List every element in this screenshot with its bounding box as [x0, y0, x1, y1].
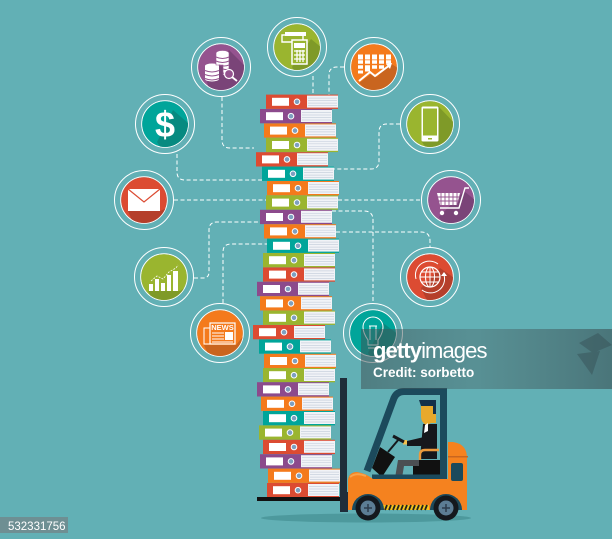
image id tag — [0, 517, 68, 533]
connector: growth chart — [194, 222, 260, 278]
icon: globe — [400, 248, 460, 307]
binder 8 — [266, 195, 338, 210]
dashed connector lines — [174, 67, 430, 303]
icon: calculator — [268, 18, 327, 77]
icon: dollar — [136, 94, 195, 154]
binder 3 — [264, 123, 336, 138]
binder 7 — [267, 181, 339, 195]
connector: news — [223, 244, 267, 303]
image id number: 532331756 — [8, 521, 66, 533]
binder 28 — [267, 483, 339, 497]
steering — [372, 436, 404, 477]
connector: dollar — [177, 154, 263, 180]
icon: mail — [114, 170, 174, 230]
news label: NEWS — [211, 323, 234, 332]
icon: market chart — [344, 38, 404, 97]
armrest — [420, 450, 439, 460]
vent — [451, 463, 463, 481]
legs — [395, 460, 419, 478]
seat — [413, 460, 441, 478]
binder 14 — [257, 282, 329, 296]
icon: cart — [422, 170, 481, 230]
connector: market chart — [329, 67, 344, 95]
binder stack — [253, 95, 340, 497]
icon: news — [190, 304, 250, 363]
connector: coins — [222, 97, 254, 148]
connector: cart — [338, 199, 421, 201]
binder 2 — [260, 109, 332, 123]
arm — [407, 437, 425, 446]
icon: coins — [192, 38, 251, 97]
binder 9 — [260, 210, 332, 224]
connector: globe — [336, 232, 430, 247]
driver — [395, 400, 441, 478]
binder 4 — [266, 138, 338, 152]
binder 10 — [264, 224, 336, 238]
binder 24 — [259, 425, 331, 440]
watermark: getty images — [361, 329, 612, 389]
forklift shadow — [261, 514, 471, 522]
icon: growth chart — [134, 248, 194, 307]
dollar sign: $ — [155, 104, 175, 145]
binder 27 — [268, 469, 340, 483]
rear wheel — [430, 494, 462, 520]
getty logo text: gettyimages — [373, 338, 487, 363]
binder 15 — [260, 296, 332, 310]
binder 18 — [259, 339, 331, 354]
hazard stripes — [383, 505, 429, 510]
binder 25 — [263, 440, 335, 454]
binder 5 — [256, 152, 328, 166]
binder 11 — [267, 239, 339, 253]
icon: phone — [400, 94, 460, 154]
binder 26 — [260, 454, 332, 468]
fork — [257, 497, 341, 501]
binder 23 — [263, 411, 335, 425]
mast — [340, 378, 347, 512]
torso — [420, 424, 437, 459]
body — [348, 442, 467, 510]
icon: lightbulb — [344, 304, 403, 363]
binder 19 — [264, 354, 336, 368]
binder 16 — [263, 311, 335, 325]
binder 17 — [253, 325, 325, 339]
credit text: Credit: sorbetto — [373, 365, 474, 380]
forklift — [257, 378, 468, 520]
binder 22 — [261, 397, 333, 411]
binder 1 — [266, 95, 338, 109]
head — [421, 402, 436, 425]
connector: lightbulb — [332, 211, 373, 303]
binder 6 — [262, 167, 334, 181]
binder 20 — [263, 368, 335, 382]
connector: calculator — [312, 76, 314, 95]
front wheel — [352, 494, 384, 520]
cab frame — [367, 392, 444, 480]
connector: mail — [174, 199, 266, 201]
binder 12 — [263, 253, 335, 267]
binder 13 — [263, 267, 335, 282]
connector: phone — [334, 124, 400, 169]
binder 21 — [257, 382, 329, 396]
